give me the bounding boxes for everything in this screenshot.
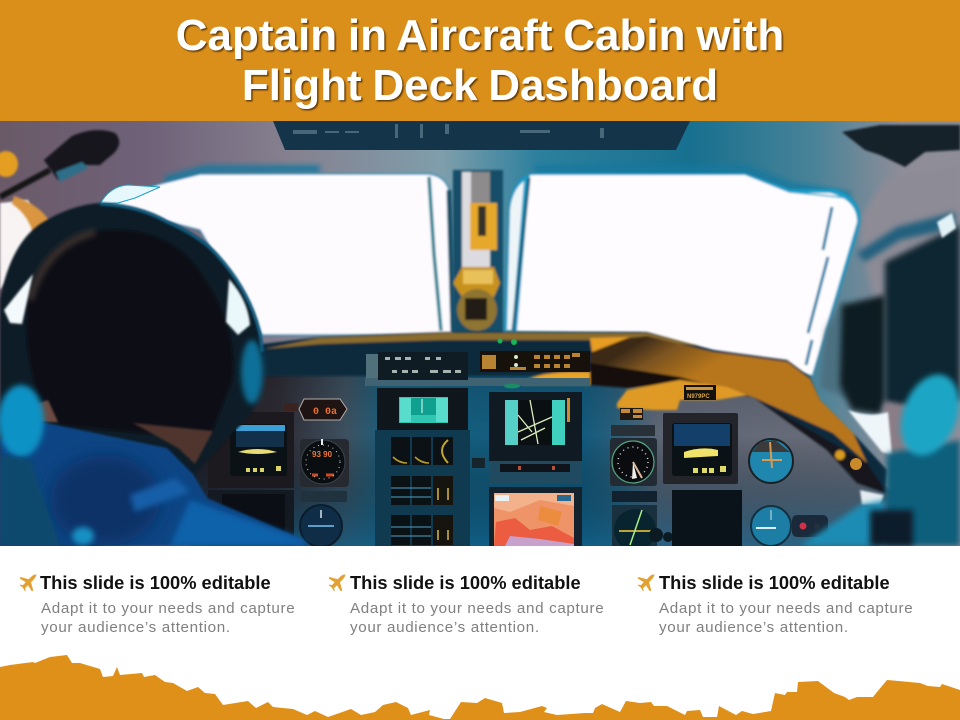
center pillar with compass	[453, 170, 503, 335]
window seen below headset	[848, 410, 892, 455]
side light of headset	[820, 300, 860, 400]
yellow light	[0, 151, 18, 177]
feature 1 text	[41, 600, 295, 636]
headset highlight	[937, 213, 956, 238]
ear cup	[840, 295, 885, 414]
white window light behind head	[0, 200, 42, 290]
orange glow	[12, 196, 50, 236]
feature 1 text: Adapt it to your needs and capture	[41, 600, 295, 617]
gauge cluster	[375, 430, 470, 546]
lower left display	[208, 490, 294, 546]
feature 3 text: your audience’s attention.	[659, 618, 849, 636]
headset band and seat	[0, 203, 262, 546]
icon: airplane	[638, 574, 654, 592]
icon: airplane	[20, 574, 36, 592]
torn paper edge	[0, 655, 960, 720]
lower left annunciator bar	[301, 491, 347, 502]
right primary flight display	[663, 413, 738, 484]
title	[176, 10, 784, 112]
header band	[0, 0, 960, 121]
shoulder	[890, 366, 960, 464]
annunciator bars	[611, 408, 657, 502]
feature 2	[328, 572, 604, 636]
feature 3 text	[659, 600, 913, 636]
glare shield	[262, 332, 887, 493]
shirt	[0, 421, 310, 546]
captain, rear view	[0, 130, 310, 546]
left primary flight display	[208, 412, 294, 488]
lower right blue gauge	[751, 506, 791, 546]
microphone	[0, 130, 119, 197]
weather radar display	[489, 487, 582, 546]
feature 3 heading: This slide is 100% editable	[659, 572, 890, 593]
instrument panel base	[190, 345, 900, 546]
title: Flight Deck Dashboard	[242, 60, 718, 110]
right blue gauge	[749, 439, 793, 483]
wavy window trim	[100, 185, 160, 204]
feature 3 text: Adapt it to your needs and capture	[659, 600, 913, 617]
feature 2 text: your audience’s attention.	[350, 618, 540, 636]
right windshield	[505, 174, 860, 375]
first officer, rear view	[800, 165, 960, 546]
lower attitude gauge	[612, 505, 673, 551]
left GPS unit	[377, 388, 468, 430]
feature 1 heading: This slide is 100% editable	[40, 572, 271, 593]
seat	[0, 385, 44, 457]
window frame glow	[165, 169, 850, 196]
feature 2 text	[350, 600, 604, 636]
small annunciator	[472, 458, 485, 468]
skin	[880, 402, 910, 455]
altimeter gauge: 93 90	[312, 450, 333, 459]
right ceiling equipment	[842, 125, 960, 167]
airspeed gauge	[610, 438, 657, 486]
lower left gauge	[300, 505, 342, 547]
photo: cockpit scene	[0, 121, 960, 546]
headset rim light	[100, 204, 262, 352]
lower right display	[672, 490, 742, 546]
grey cabin wall	[860, 165, 960, 340]
hair highlight	[30, 232, 95, 300]
icon: airplane	[328, 574, 346, 592]
control knobs	[792, 458, 862, 537]
head	[26, 230, 233, 434]
feature 2 heading: This slide is 100% editable	[350, 572, 581, 593]
ear cup highlights	[226, 279, 250, 335]
neck skin	[133, 423, 213, 464]
multifunction map display	[489, 392, 582, 484]
digital clock readout: 0 0a	[313, 407, 337, 418]
overhead console	[273, 121, 690, 150]
arm	[800, 500, 885, 546]
feature 3	[638, 572, 913, 636]
headband	[857, 212, 955, 262]
placard	[684, 385, 716, 400]
feature 2 text: Adapt it to your needs and capture	[350, 600, 604, 617]
cabin ceiling	[0, 121, 960, 546]
title: Captain in Aircraft Cabin with	[176, 10, 784, 60]
feature 1 text: your audience’s attention.	[41, 618, 231, 636]
head mass	[885, 225, 960, 410]
altimeter gauge	[300, 439, 349, 487]
digital clock readout	[284, 399, 347, 420]
left windshield	[100, 174, 454, 335]
feature 1	[20, 572, 295, 636]
lower body	[885, 440, 960, 546]
radio stack	[365, 338, 590, 388]
placard: N979PC	[687, 394, 710, 400]
